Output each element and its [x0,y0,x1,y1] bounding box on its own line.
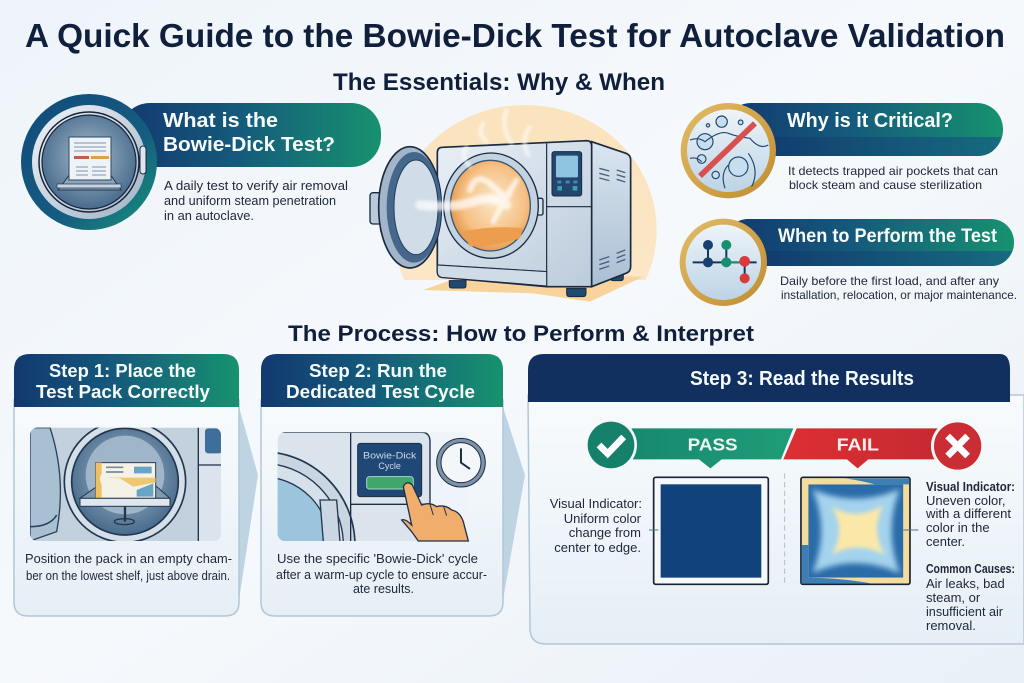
heading: the process: The Process: How to Perform & Interpret [288,321,755,346]
card body [14,400,239,616]
step 2 description: Use the specific 'Bowie-Dick' cycle [277,552,478,566]
panel: step 2 [260,354,525,617]
banner: why critical [725,103,1003,156]
pass description: change from [569,525,641,540]
fail ribbon [783,419,984,473]
fail description: Uneven color, [926,493,1006,508]
icon: timeline nodes [680,219,767,306]
description: installation, relocation, or major maintenance. [781,288,1017,302]
description: A daily test to verify air removal [164,179,348,193]
step 1 description: ber on the lowest shelf, just above drain. [26,569,230,583]
header: step 1 [14,354,239,407]
fail description: steam, or [926,590,981,605]
fail description: insufficient air [926,604,1004,619]
card body [261,400,503,616]
pass fail banner [585,419,984,585]
fail description: Visual Indicator: [926,480,1015,494]
step 2 heading: Step 2: Run the [309,360,447,381]
step 1 description: Position the pack in an empty cham- [25,552,232,566]
step 2 description: after a warm-up cycle to ensure accur- [276,568,487,582]
arrow: step 1 to step 2 [239,407,258,600]
pass ribbon: PASS [688,434,738,454]
header: step 2 [261,354,503,407]
fail indicator sheet [801,477,918,584]
banner: what is the test [120,103,381,167]
description: block steam and cause sterilization [789,178,982,192]
pass description: Visual Indicator: [550,496,642,511]
description [788,164,998,192]
banner: when to perform [725,219,1014,266]
illustration: control panel with finger pressing button: Cycle [378,461,401,471]
icon: air bubbles with prohibition slash [681,103,776,198]
illustration: test pack on shelf [30,421,222,542]
icon: autoclave chamber with test sheet [21,94,157,230]
fail description: with a different [925,506,1011,521]
description: Daily before the first load, and after any [780,274,999,288]
pass description: Uniform color [564,511,642,526]
fail description: color in the [926,520,990,535]
step 1 heading: Test Pack Correctly [36,381,211,402]
header: step 3 [528,354,1010,402]
heading: the essentials: The Essentials: Why & When [333,69,665,96]
panel: why is it critical [681,103,1003,198]
banner heading: When to Perform the Test [778,225,997,247]
illustration: control panel with finger pressing button: Bowie-Dick [363,450,417,460]
step 2 heading: Dedicated Test Cycle [286,381,475,402]
fail description: center. [926,534,965,549]
description [164,179,348,223]
pass ribbon [585,419,793,471]
illustration: autoclave with steam [369,105,657,302]
banner heading: Why is it Critical? [787,110,953,132]
description: in an autoclave. [164,209,254,223]
pass description [550,496,642,555]
banner heading [163,109,335,156]
panel: step 3 [528,354,1024,644]
description [780,274,1017,302]
pass indicator sheet [649,477,768,584]
description: It detects trapped air pockets that can [788,164,998,178]
description: and uniform steam penetration [164,194,336,208]
step 2 description: ate results. [353,582,414,596]
banner heading: Bowie-Dick Test? [163,133,335,156]
banner heading: What is the [163,109,278,132]
fail description [925,480,1015,633]
step 3 heading: Step 3: Read the Results [690,368,914,390]
step 1 heading [36,360,211,402]
step 2 heading [286,360,475,402]
step 1 description [25,552,232,583]
arrow: step 2 to step 3 [503,407,525,600]
panel: step 1 [14,354,258,616]
fail description: Air leaks, bad [926,576,1005,591]
title: A Quick Guide to the Bowie-Dick Test for Autoclave Validation [25,17,1005,54]
illustration: control panel with finger pressing button [278,432,486,542]
step 1 heading: Step 1: Place the [49,360,196,381]
fail description: removal. [926,618,976,633]
step 2 description [276,552,487,596]
panel: when to perform [680,219,1017,306]
card body [528,395,1024,644]
fail ribbon: FAIL [837,434,879,454]
pass description: center to edge. [554,540,641,555]
panel: what is the test [21,94,381,230]
